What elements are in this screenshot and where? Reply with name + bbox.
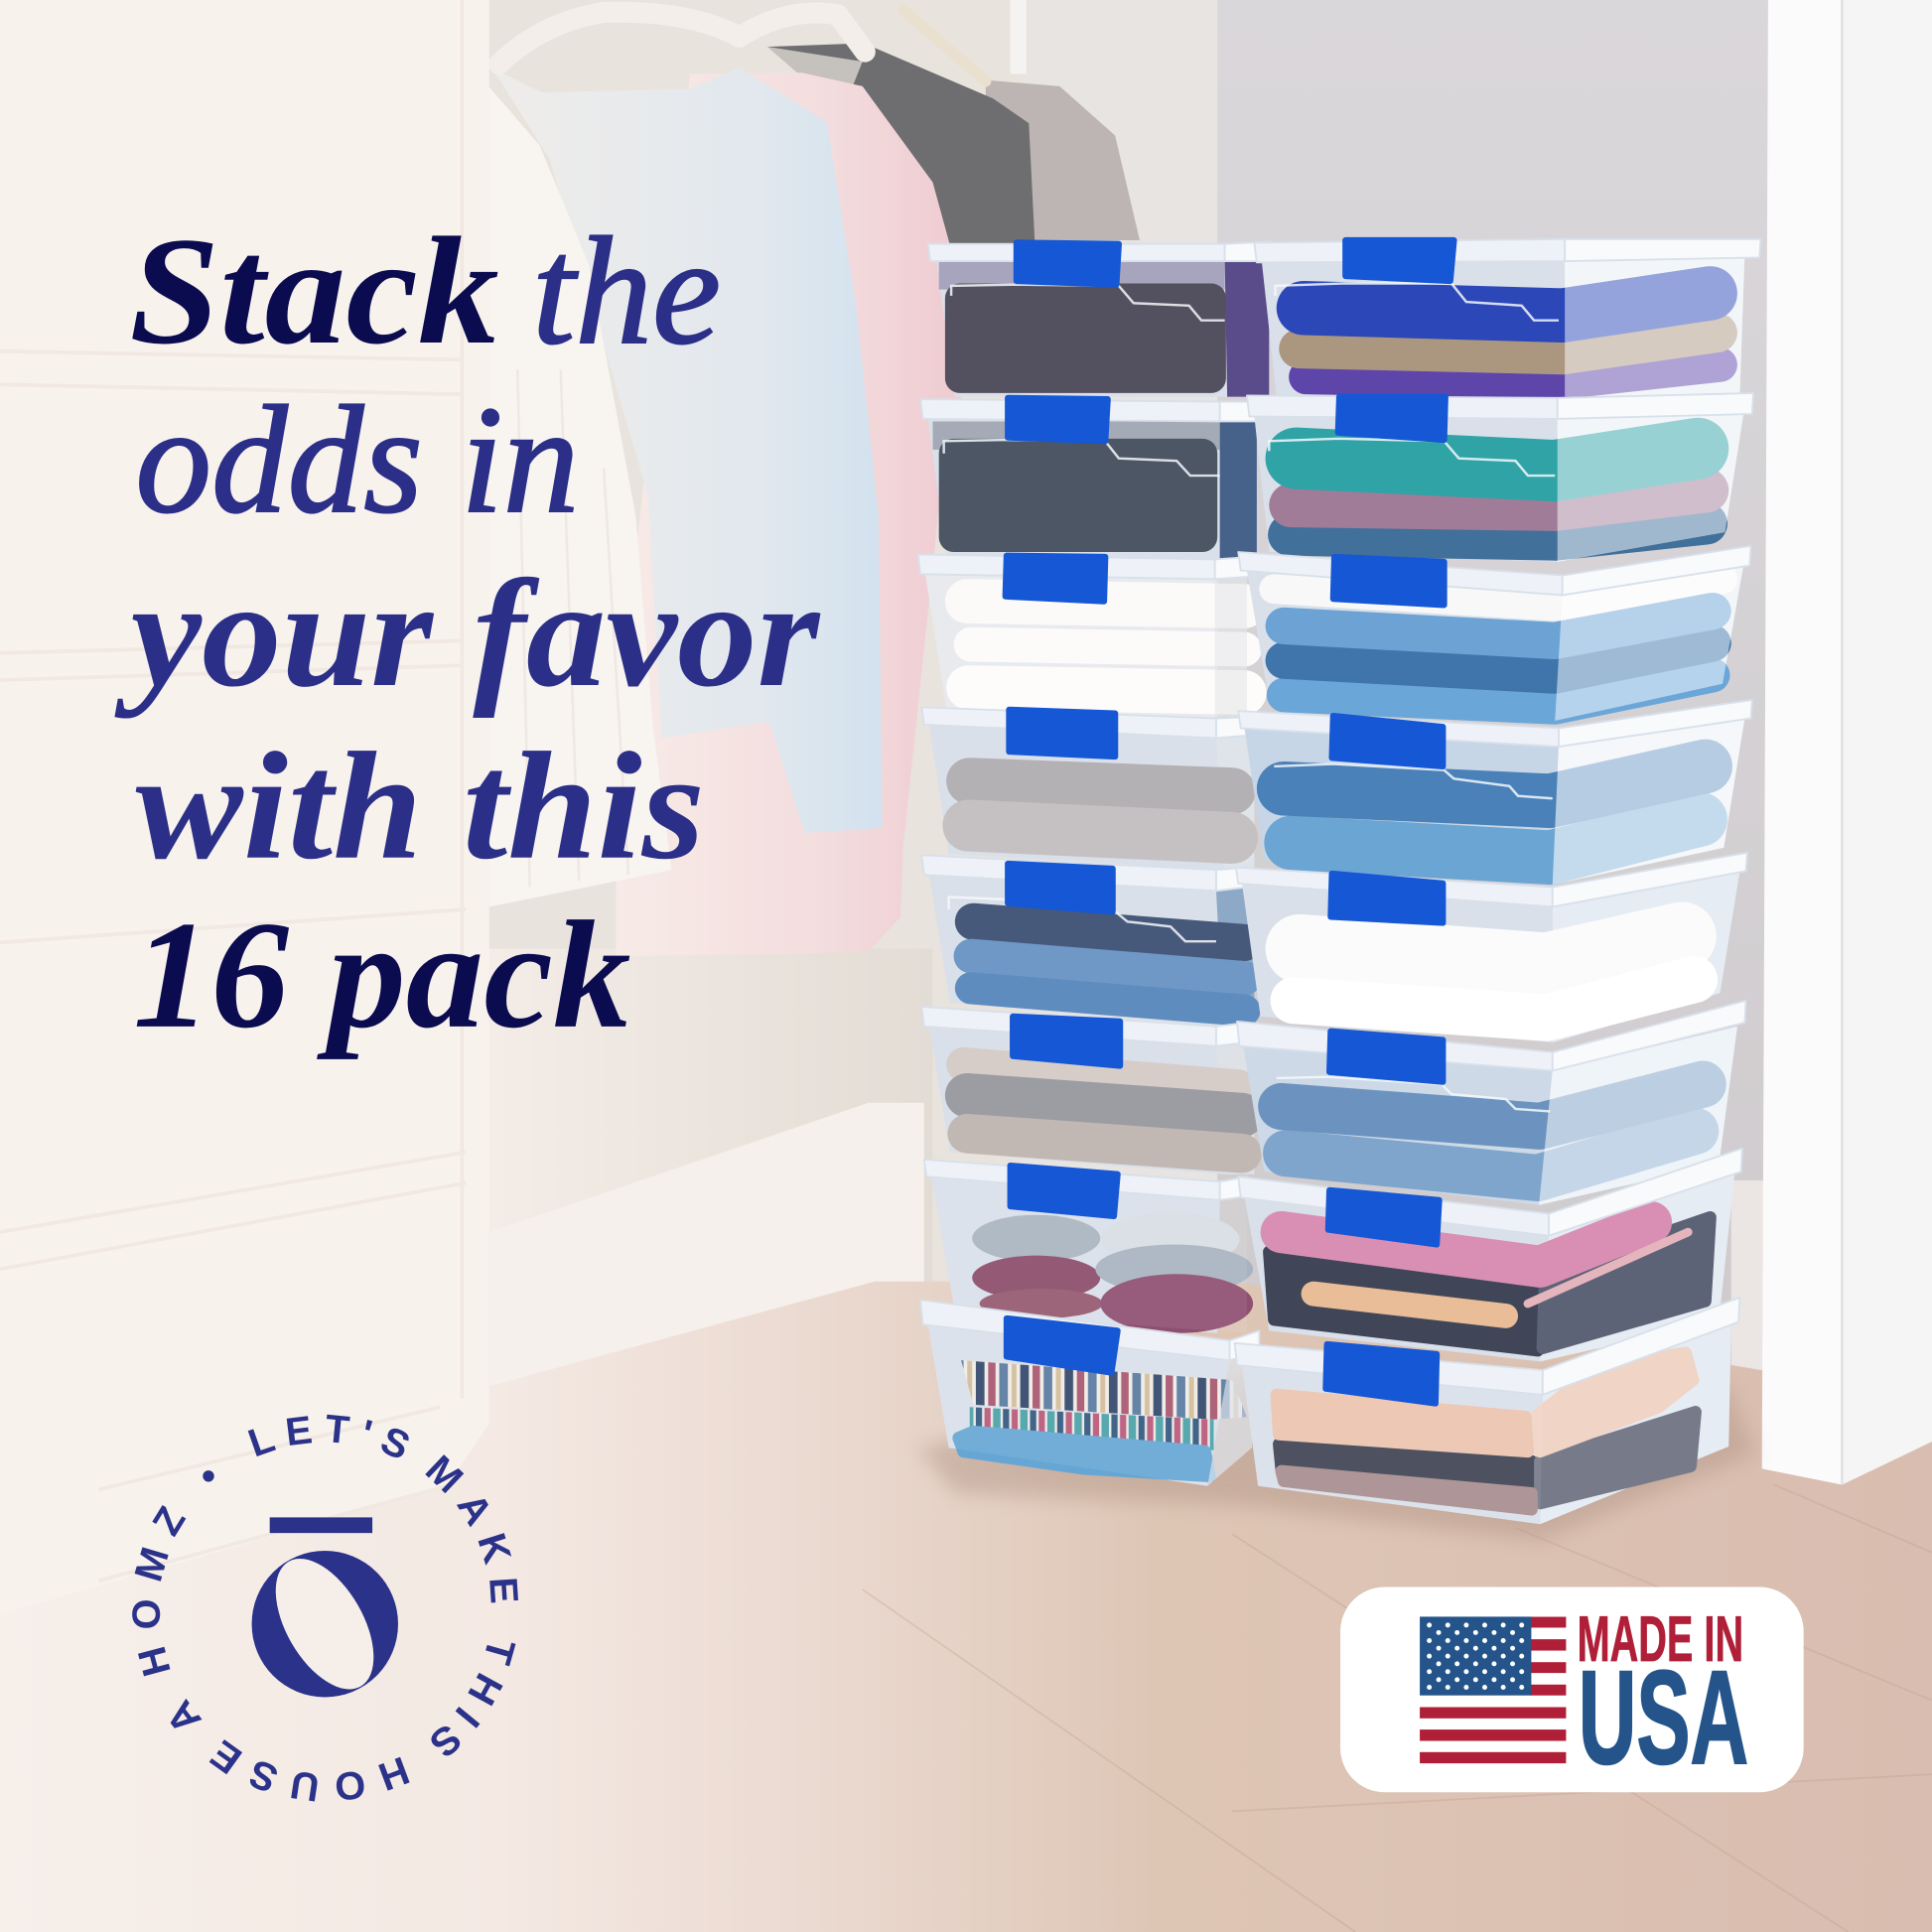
bin L6 [921,1007,1254,1174]
floor shadow under bins [918,1380,1756,1540]
bin R7 [1238,1149,1742,1361]
heading [114,206,821,1060]
bin R2 [1247,393,1753,562]
bin L7 [924,1160,1253,1333]
bin L5 [921,855,1254,1027]
door frame [1762,0,1932,1484]
bin R4 [1238,700,1752,885]
bin L3 [918,554,1251,717]
bin stack: right column [1235,239,1760,1524]
heading: your favor [114,548,821,719]
badge: made in USA: USA [1579,1644,1748,1792]
bin L1 [928,241,1272,397]
bin R6 [1237,1001,1746,1205]
circular slogan text: LET'SMAKE THISHOUSEAHOMZ [132,1414,518,1801]
icon: american flag [1420,1616,1566,1763]
badge: made in USA [1340,1587,1804,1792]
badge: made in USA: MADE IN [1578,1603,1743,1675]
bin R1 [1254,239,1760,397]
bin R5 [1236,853,1747,1042]
bin R8 [1235,1298,1739,1524]
heading: 16 pack [133,890,630,1060]
bin L8 [920,1300,1259,1486]
bin stack: left column [918,241,1272,1486]
logo: circular brand mark [132,1414,518,1801]
heading: Stack [129,206,499,376]
heading: the [532,206,721,376]
bin L2 [920,398,1259,561]
heading: odds in [136,374,579,545]
dresser cabinet [0,0,489,1614]
bin L4 [921,707,1254,870]
bin R3 [1238,546,1751,721]
hanging clothes [477,10,1140,956]
heading: with this [136,721,705,892]
